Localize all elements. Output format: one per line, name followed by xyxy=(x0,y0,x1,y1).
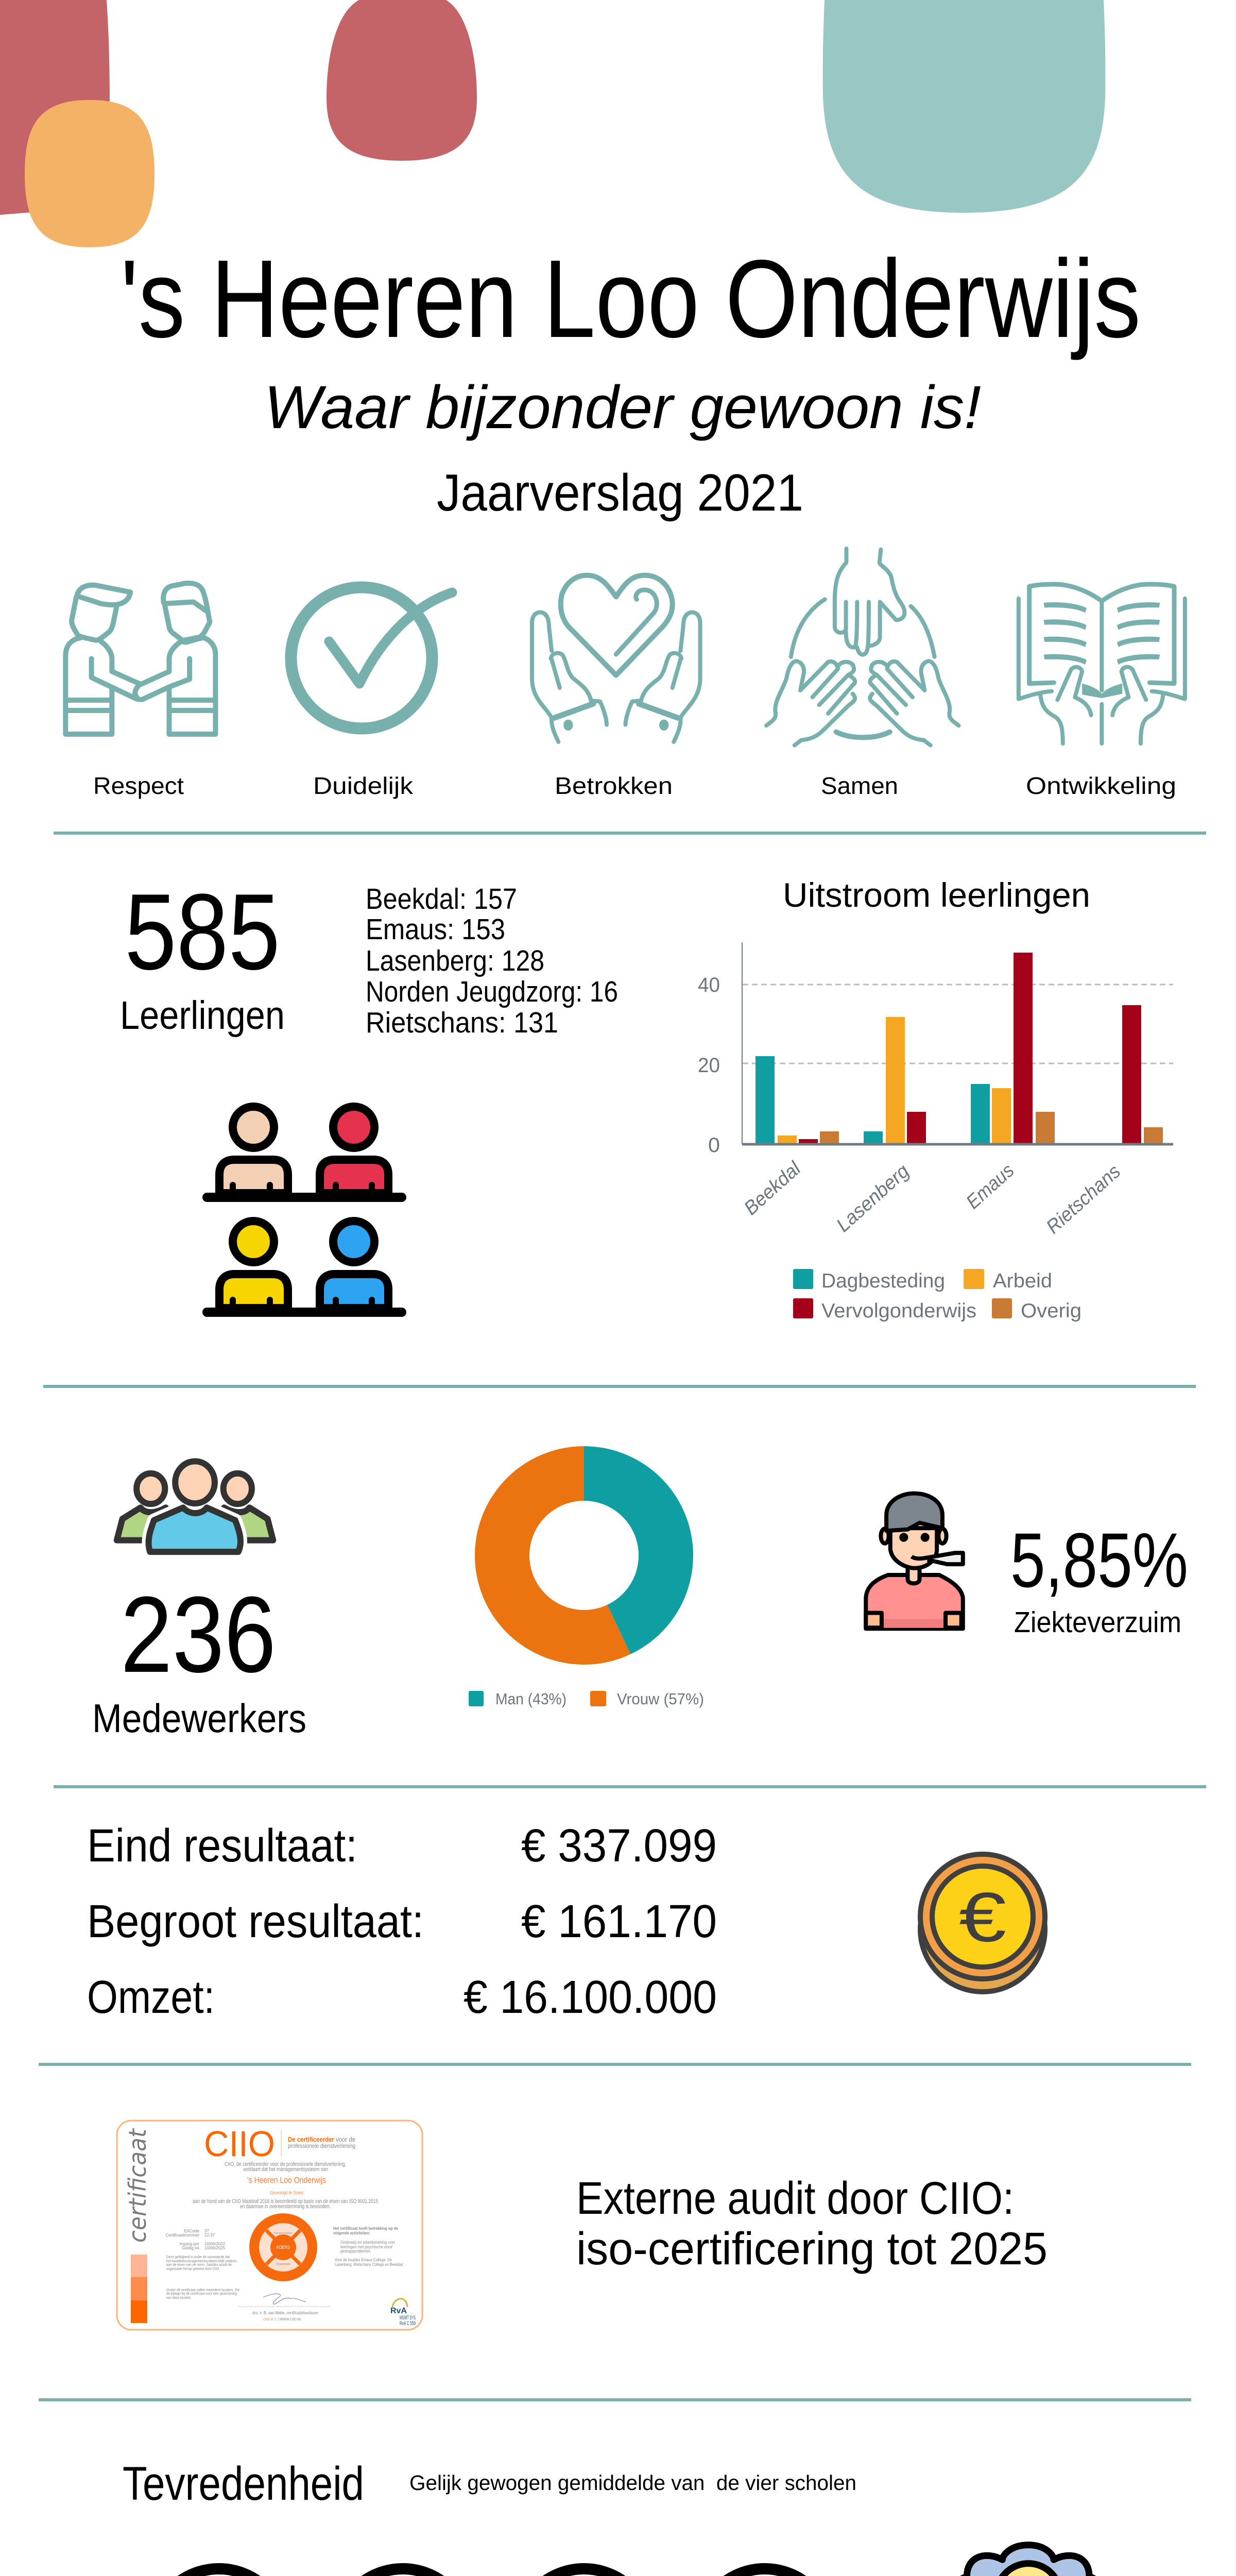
icon: respect handshake xyxy=(65,583,215,734)
certificate text: het kwaliteitsmanagementsysteem blijft voldoen xyxy=(166,2260,237,2263)
certificate text: volgende activiteiten: xyxy=(333,2231,370,2235)
certificate text: leerlingen met psychische en/of xyxy=(340,2245,393,2249)
certificate text: Certificaatnummer xyxy=(166,2233,199,2238)
audit text xyxy=(576,2172,1048,2274)
certificate text: drs. ir. B. van Melle, certificatiebeslisser xyxy=(252,2311,318,2315)
audit text: iso-certificering tot 2025 xyxy=(576,2223,1048,2274)
certificate text: aan de hand van de CIIO Maatstaf 2016 is beoordeeld op basis van de eisen van ISO 9001:2015 xyxy=(193,2198,378,2205)
heading: tevredenheid: Tevredenheid xyxy=(123,2458,364,2510)
stat: ziekteverzuim xyxy=(1010,1517,1188,1639)
icon: euro coin: € xyxy=(959,1878,1006,1956)
chart legend: Arbeid xyxy=(993,1270,1052,1292)
certificate logo: CIIO xyxy=(204,2124,275,2164)
certificate text: Gevestigd te Soest xyxy=(270,2190,303,2195)
icon: four students at tables xyxy=(207,1107,402,1312)
certificate text: EACode xyxy=(184,2229,200,2233)
score circle: medewerkers xyxy=(697,2569,832,2576)
certificate text: de bijlage bij dit certificaat voor een opsomming xyxy=(166,2292,237,2296)
bar chart: uitstroom leerlingen: Beekdal xyxy=(740,1157,805,1219)
stat: ziekteverzuim: Ziekteverzuim xyxy=(1014,1606,1181,1639)
list: students per school: Lasenberg: 128 xyxy=(366,944,544,977)
certificate text: Lasenberg, Rietschans College en Beekdal xyxy=(335,2262,403,2267)
certificate text: Onderwijs en arbeidstraining voor xyxy=(340,2240,395,2245)
icon: sick person with thermometer xyxy=(866,1494,963,1629)
certificate accreditation mark: RvA C 559 xyxy=(400,2320,416,2327)
certificate text: professionele dienstverlening xyxy=(288,2142,355,2149)
financial results: Omzet: xyxy=(87,1972,215,2023)
certificate text: CIIO, de certificeerder voor de professionele dienstverlening, xyxy=(225,2161,346,2167)
list: students per school: Norden Jeugdzorg: 16 xyxy=(366,975,618,1008)
financial results: € 337.099 xyxy=(521,1820,717,1872)
certificate colour bars xyxy=(131,2255,147,2323)
stat: leerlingen count: 585 xyxy=(125,871,280,992)
financial results xyxy=(87,1820,717,2023)
bar chart: uitstroom leerlingen: Lasenberg xyxy=(832,1160,914,1236)
tagline: Waar bijzonder gewoon is! xyxy=(264,374,981,442)
certificate text: CIIO B.V. | WWW.CIIO.NL xyxy=(263,2318,302,2321)
chart legend: Vervolgonderwijs xyxy=(821,1300,976,1322)
certificate wheel diagram xyxy=(249,2213,317,2281)
certificate text: verklaart dat het managementsysteem van xyxy=(243,2166,328,2173)
certificate text: Het certificaat heeft betrekking op de xyxy=(333,2226,398,2231)
stat: medewerkers count: 236 xyxy=(121,1574,276,1695)
icon: betrokken heart in hands xyxy=(532,575,700,742)
chart title: Uitstroom leerlingen xyxy=(783,876,1090,914)
core value labels xyxy=(93,772,1176,799)
icon: duidelijk check circle xyxy=(291,587,452,728)
certificate text: 10/06/2025 xyxy=(204,2246,226,2250)
certificate text: 37 xyxy=(204,2229,209,2233)
certificate side label: certificaat xyxy=(124,2128,151,2243)
certificate wheel diagram: Organisatie xyxy=(276,2263,290,2266)
financial results: Eind resultaat: xyxy=(87,1820,357,1872)
certificate text: gedragsproblemen. xyxy=(340,2249,371,2253)
stat: leerlingen count xyxy=(120,871,285,1038)
chart legend xyxy=(793,1269,1082,1322)
donut legend: Man (43%) xyxy=(495,1690,566,1708)
icon: happy thought cloud with people xyxy=(945,2545,1112,2576)
icon: samen three hands xyxy=(766,549,958,745)
audit text: Externe audit door CIIO: xyxy=(576,2172,1014,2224)
certificate text: 10/06/2022 xyxy=(204,2242,226,2246)
donut legend xyxy=(469,1690,704,1708)
certificate wheel diagram: KOERS xyxy=(277,2245,290,2250)
financial results: Begroot resultaat: xyxy=(87,1896,424,1947)
list: students per school xyxy=(366,883,618,1039)
certificate text: De certificeerder voor de xyxy=(288,2136,355,2143)
score circle: leerlingen xyxy=(151,2569,286,2576)
core value labels: Duidelijk xyxy=(313,772,414,799)
certificate text: van deze locaties. xyxy=(166,2296,192,2300)
list: students per school: Emaus: 153 xyxy=(366,913,505,946)
certificate text: organisatie hierop getoetst door CIIO. xyxy=(166,2267,220,2271)
certificate text: aan de eisen van de norm. Jaarlijks wordt de xyxy=(166,2263,232,2267)
financial results: € 16.100.000 xyxy=(464,1972,717,2023)
certificate text: Onder dit certificaat vallen meerdere locaties. Zie xyxy=(166,2289,239,2292)
list: students per school: Beekdal: 157 xyxy=(366,883,517,916)
bar chart: uitstroom leerlingen: Rietschans xyxy=(1042,1161,1125,1238)
certificate text: Voor de locaties Emaus College, De xyxy=(335,2258,392,2262)
core value labels: Betrokken xyxy=(555,772,673,799)
certificate accreditation mark: RvA xyxy=(390,2307,407,2315)
certificate wheel diagram: Kernprocessen xyxy=(274,2232,293,2235)
certificate text: Ingang per xyxy=(180,2242,199,2246)
stat: leerlingen count: Leerlingen xyxy=(120,993,285,1038)
core value labels: Ontwikkeling xyxy=(1026,772,1176,799)
certificate text: 22.37 xyxy=(204,2233,215,2238)
bar chart: uitstroom leerlingen: Emaus xyxy=(962,1160,1019,1213)
icon: ontwikkeling open book xyxy=(1019,584,1185,743)
stat: ziekteverzuim: 5,85% xyxy=(1010,1517,1188,1603)
icon: euro coin xyxy=(920,1854,1045,1992)
bar chart: uitstroom leerlingen xyxy=(698,942,1173,1238)
bar chart: uitstroom leerlingen: 20 xyxy=(698,1054,720,1077)
certificate text: Geldig tot xyxy=(182,2246,200,2250)
certificate image xyxy=(117,2121,422,2330)
stat: medewerkers count: Medewerkers xyxy=(92,1696,306,1741)
certificate accreditation mark: MGMT SYS xyxy=(400,2315,416,2321)
chart legend: Overig xyxy=(1021,1300,1082,1322)
core value labels: Respect xyxy=(93,772,184,799)
bar chart: uitstroom leerlingen: 0 xyxy=(708,1134,720,1157)
financial results: € 161.170 xyxy=(521,1896,717,1947)
decorative blobs xyxy=(0,0,1105,247)
certificate text: 's Heeren Loo Onderwijs xyxy=(247,2175,326,2185)
score circle: partners xyxy=(517,2569,651,2576)
score circle: ouders xyxy=(335,2569,470,2576)
chart legend: Dagbesteding xyxy=(821,1270,945,1292)
core value labels: Samen xyxy=(821,772,898,799)
subtitle: Jaarverslag 2021 xyxy=(437,464,803,522)
certificate accreditation mark xyxy=(390,2299,416,2327)
note: gewogen gemiddelde: Gelijk gewogen gemiddelde van de vier scholen xyxy=(409,2471,856,2495)
certificate text: en daarmee in overeenstemming is bevonden. xyxy=(240,2204,331,2210)
bar chart: uitstroom leerlingen: 40 xyxy=(698,974,720,996)
stat: medewerkers count xyxy=(92,1574,306,1741)
donut chart: man vrouw xyxy=(475,1446,693,1665)
certificate text: Deze geldigheid is onder de voorwaarde dat xyxy=(166,2256,230,2259)
icon: team of three xyxy=(117,1461,273,1552)
donut legend: Vrouw (57%) xyxy=(617,1690,704,1708)
list: students per school: Rietschans: 131 xyxy=(366,1006,558,1039)
certificate text xyxy=(166,2130,403,2321)
